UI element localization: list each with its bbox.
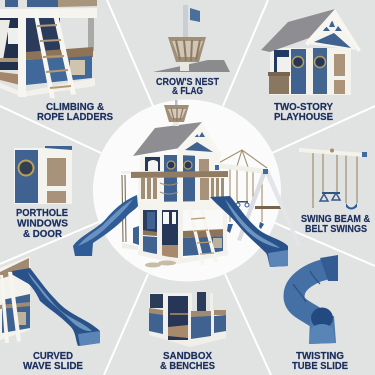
stepping stones xyxy=(145,260,176,268)
panel: two-story playhouse xyxy=(261,9,361,123)
label: crow's nest and flag: & FLAG xyxy=(172,86,203,97)
illustration: crow's nest with flag xyxy=(153,5,230,72)
label: two-story playhouse: TWO-STORY xyxy=(274,102,333,113)
label: sandbox and benches: SANDBOX xyxy=(163,351,212,362)
label: twisting tube slide: TWISTING xyxy=(296,351,344,362)
illustration: tube slide xyxy=(293,255,338,344)
illustration: swing beam xyxy=(299,148,367,210)
tower upper level xyxy=(121,154,228,210)
label: porthole windows and door: WINDOWS xyxy=(17,218,68,230)
panel: climbing and rope ladders xyxy=(0,0,113,123)
label: porthole windows and door xyxy=(16,208,68,240)
right slide xyxy=(210,196,288,267)
label: swing beam and belt swings xyxy=(301,214,371,235)
label: climbing and rope ladders: CLIMBING & xyxy=(46,102,105,113)
label: twisting tube slide xyxy=(292,351,348,372)
illustration: complete playset xyxy=(73,100,301,268)
label: sandbox and benches xyxy=(160,351,215,372)
label: two-story playhouse xyxy=(274,102,333,123)
swing set xyxy=(215,150,301,247)
rope ladder xyxy=(122,175,126,242)
illustration: tower with ladder xyxy=(0,0,97,98)
label: crow's nest and flag: CROW'S NEST xyxy=(156,77,220,88)
tower roof xyxy=(133,122,222,157)
label: climbing and rope ladders xyxy=(37,102,113,123)
tower lower level xyxy=(122,208,228,264)
panel: central playset xyxy=(73,100,301,282)
label: curved wave slide: WAVE SLIDE xyxy=(23,361,83,372)
label: climbing and rope ladders: ROPE LADDERS xyxy=(37,112,113,123)
panel: sandbox and benches xyxy=(149,292,226,372)
white circle xyxy=(93,100,281,282)
ladder xyxy=(188,207,218,265)
left slide xyxy=(73,195,138,256)
panel: curved wave slide xyxy=(0,256,100,372)
label: swing beam and belt swings: BELT SWINGS xyxy=(305,224,367,235)
illustration: small tower and wave slide xyxy=(0,256,100,346)
label: porthole windows and door: PORTHOLE xyxy=(16,208,68,219)
label: twisting tube slide: TUBE SLIDE xyxy=(292,361,348,372)
crow's nest xyxy=(164,100,189,126)
illustration: sandbox structure xyxy=(149,292,226,347)
panel: twisting tube slide xyxy=(292,255,348,372)
illustration: wall with porthole and door xyxy=(14,146,72,204)
label: curved wave slide: CURVED xyxy=(33,351,73,362)
panel: crow's nest and flag xyxy=(153,5,230,97)
label: sandbox and benches: & BENCHES xyxy=(160,361,215,372)
panel: swing beam and belt swings xyxy=(299,148,371,235)
illustration: playhouse xyxy=(261,9,361,95)
label: two-story playhouse: PLAYHOUSE xyxy=(274,112,333,123)
label: porthole windows and door: & DOOR xyxy=(23,229,63,240)
label: crow's nest and flag xyxy=(156,77,220,97)
panel: porthole windows and door xyxy=(14,146,72,240)
label: curved wave slide xyxy=(23,351,83,372)
